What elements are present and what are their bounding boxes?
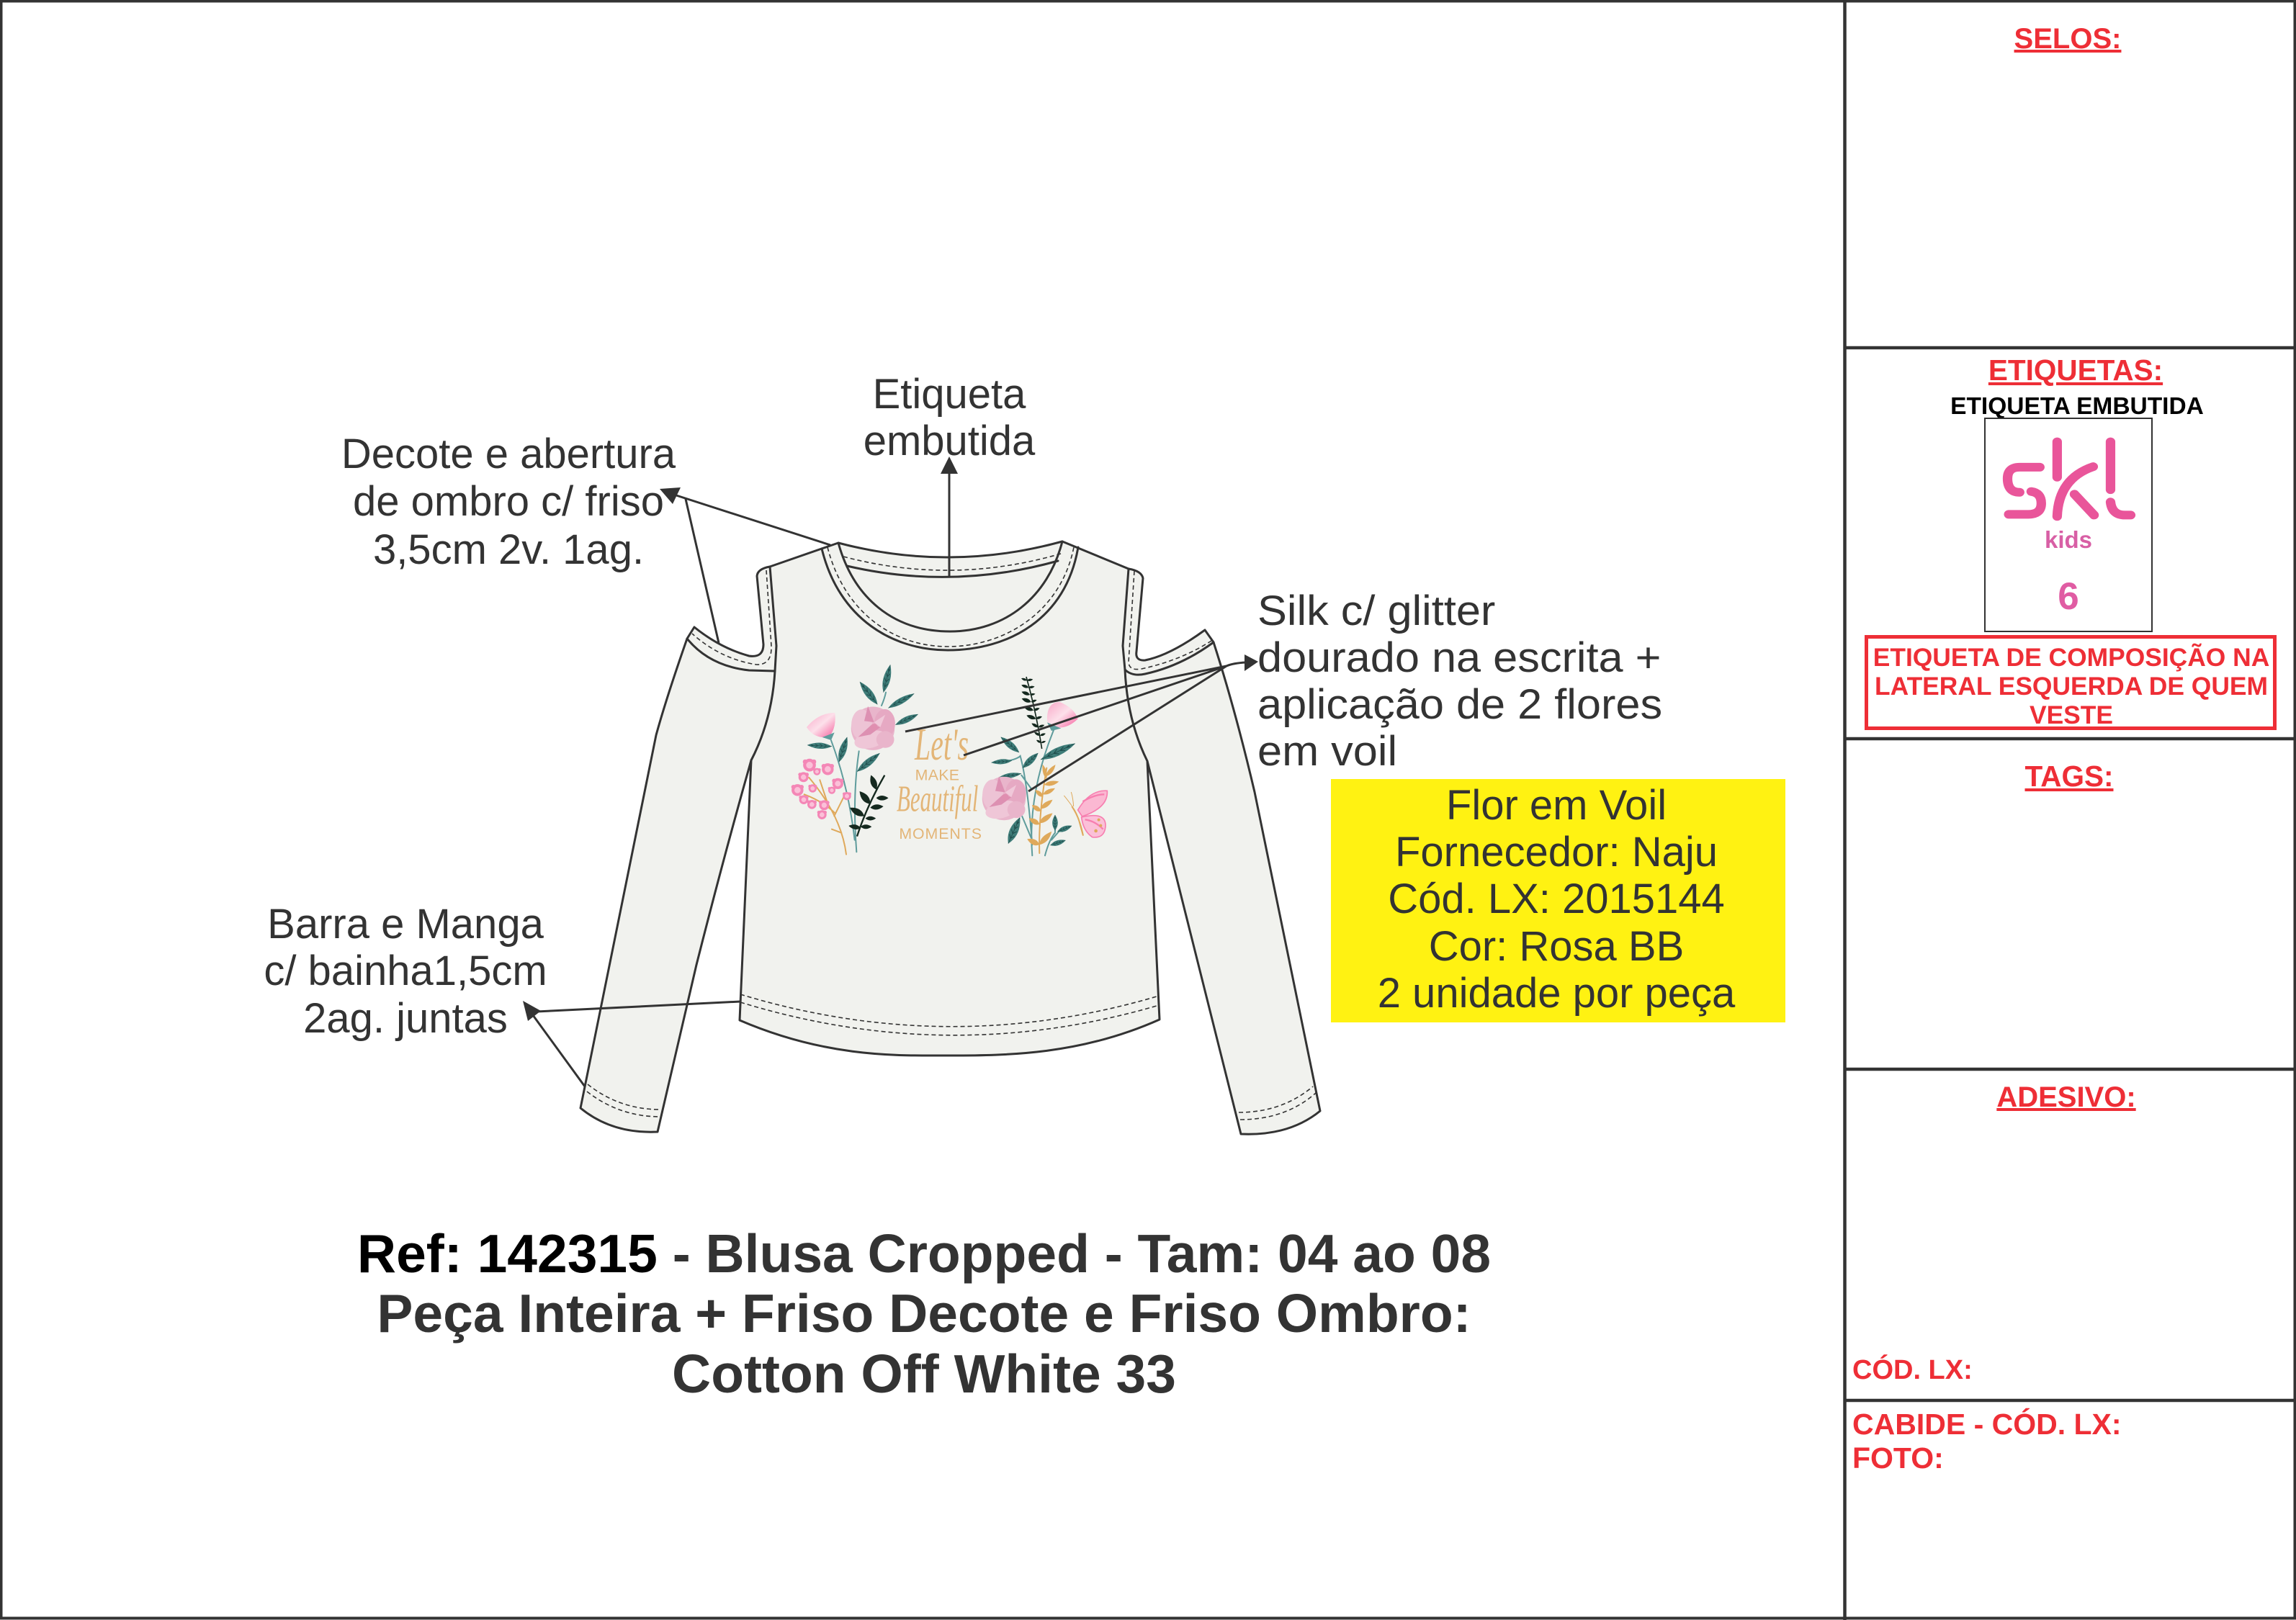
- heading: etiquetas: ETIQUETAS:: [1988, 354, 2163, 387]
- title: Ref: 142315 - Blusa Cropped - Tam: 04 ao 08: [357, 1223, 1491, 1284]
- label: silk: aplicação de 2 flores: [1257, 681, 1662, 728]
- icon: skl kids size label: 6: [2058, 575, 2079, 618]
- print lettering: Beautiful: [897, 779, 978, 820]
- heading: adesivo: ADESIVO:: [1996, 1081, 2136, 1113]
- label: etiqueta embutida: Etiqueta: [873, 371, 1026, 418]
- label: cabide: [1852, 1408, 2122, 1475]
- title: [357, 1223, 1491, 1404]
- icon: skl kids size label: kids: [2045, 526, 2092, 553]
- print lettering: Let's: [914, 719, 969, 770]
- label: silk: [1257, 588, 1662, 775]
- label: etiqueta embutida: [864, 371, 1036, 464]
- heading: selos: SELOS:: [2014, 23, 2121, 55]
- label: decote: Decote e abertura: [341, 431, 676, 477]
- callout arrow: silk: [905, 654, 1258, 791]
- label: silk: em voil: [1257, 728, 1397, 775]
- callout: etiqueta de composicao: LATERAL ESQUERDA DE QUEM: [1875, 672, 2268, 701]
- label: barra e manga: 2ag. juntas: [303, 995, 508, 1042]
- print lettering: MAKE: [915, 766, 959, 783]
- silk print: flowers and lettering: [792, 664, 1107, 855]
- label: barra e manga: Barra e Manga: [267, 901, 544, 948]
- garment: long sleeve cold-shoulder cropped blouse: [580, 541, 1320, 1134]
- print lettering: MOMENTS: [899, 825, 982, 842]
- callout: flor em voil: 2 unidade por peça: [1378, 970, 1736, 1017]
- callout: flor em voil: Fornecedor: Naju: [1395, 829, 1718, 876]
- label: silk: Silk c/ glitter: [1257, 588, 1495, 634]
- label: decote: [341, 431, 676, 573]
- right bouquet: [982, 677, 1078, 855]
- label: cabide: CABIDE - CÓD. LX:: [1852, 1408, 2122, 1441]
- callout arrow: barra e manga: [523, 1001, 740, 1086]
- label: barra e manga: c/ bainha1,5cm: [264, 948, 547, 994]
- icon: skl kids size label: [1985, 418, 2152, 631]
- callout: flor em voil: Cód. LX: 2015144: [1388, 876, 1725, 922]
- heading: etiqueta embutida: ETIQUETA EMBUTIDA: [1950, 393, 2204, 420]
- label: decote: 3,5cm 2v. 1ag.: [373, 526, 644, 573]
- print lettering: [897, 719, 982, 842]
- callout arrow: etiqueta embutida: [941, 456, 958, 577]
- label: silk: dourado na escrita +: [1257, 634, 1661, 681]
- garment seams: [687, 541, 1214, 761]
- label: barra e manga: [264, 901, 547, 1042]
- callout arrow: decote e ombro: [660, 487, 830, 643]
- butterfly: [1064, 791, 1107, 837]
- callout: etiqueta de composicao: VESTE: [2030, 701, 2113, 729]
- title: Peça Inteira + Friso Decote e Friso Ombro:: [377, 1283, 1471, 1344]
- label: decote: de ombro c/ friso: [353, 478, 664, 525]
- label: etiqueta embutida: embutida: [864, 418, 1036, 464]
- label: cabide: FOTO:: [1852, 1441, 1944, 1475]
- callout: flor em voil: [1331, 779, 1785, 1022]
- callout: flor em voil: Cor: Rosa BB: [1429, 923, 1684, 970]
- callout: etiqueta de composicao: [1867, 636, 2274, 729]
- garment silhouette: [580, 541, 1320, 1134]
- garment stitching: [587, 547, 1316, 1120]
- callout: flor em voil: Flor em Voil: [1446, 782, 1667, 829]
- heading: tags: TAGS:: [2025, 760, 2113, 793]
- left bouquet: [792, 664, 920, 855]
- title: Cotton Off White 33: [672, 1344, 1176, 1404]
- label: cod lx: CÓD. LX:: [1852, 1354, 1973, 1385]
- callout: etiqueta de composicao: ETIQUETA DE COMPOSIÇÃO NA: [1873, 643, 2269, 672]
